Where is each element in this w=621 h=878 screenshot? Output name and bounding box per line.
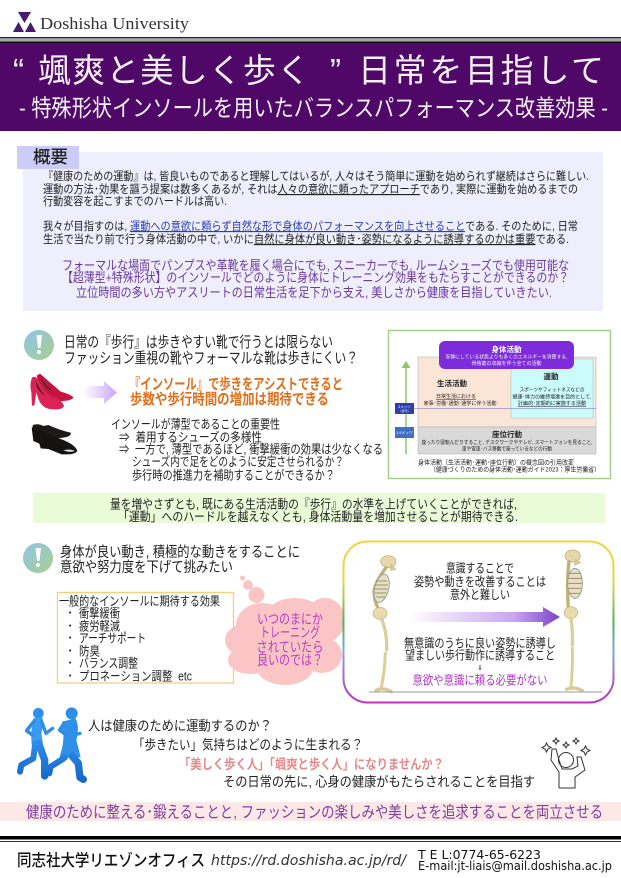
heading: good movement: [60, 544, 300, 576]
light activity area: [418, 357, 596, 427]
panel: insole effects list: [58, 592, 234, 684]
text: unconscious guidance: 意欲や意識に頼る必要がない: [412, 672, 548, 688]
intensity arrow: [405, 366, 407, 454]
panel: insole effects list: ･: [67, 632, 73, 646]
text: why walk: その日常の先に, 心身の健康がもたらされることを目指す: [223, 774, 535, 790]
physical activity header: [439, 341, 574, 369]
heading: good movement: 意欲や努力度を下げて挑みたい: [60, 559, 233, 576]
panel: green conclusion: [33, 493, 605, 524]
text: thin insole importance: ⇒ 着用するシューズの多様性: [119, 430, 262, 444]
overview heading: 概要: [33, 147, 68, 167]
panel: green conclusion: 量を増やさずとも, 既にある生活活動の『歩行』の水準を上げていくことができれば,: [110, 496, 517, 512]
main title: 日常を目指して: [358, 52, 604, 89]
exercise box: [511, 359, 593, 418]
arrow: posture improvement: [408, 607, 560, 627]
text: thin insole importance: [111, 416, 383, 482]
3 METs label: (歩行): [400, 408, 408, 413]
university logo: [13, 12, 190, 33]
panel: insole effects list: ･: [67, 656, 73, 670]
text: conscious posture: 意外と難しい: [450, 587, 510, 602]
label: exercise: 計画的･定期的に実施する活動: [518, 400, 586, 407]
skeleton: hunched: [371, 556, 396, 692]
panel: insole effects list: 一般的なインソールに期待する効果: [59, 594, 220, 608]
skeleton: upright: [564, 550, 582, 691]
icon: exclamation 2: [23, 543, 53, 573]
title banner: [0, 43, 621, 131]
diagram caption: （健康づくりのための身体活動･運動ガイド2023：厚生労働省）: [430, 464, 600, 474]
university name: Doshisha University: [40, 14, 190, 33]
overview text: 生活で当たり前で行う身体活動の中で, いかに自然に身体が良い動き･姿勢になるように誘導するのかは重要である.: [43, 232, 569, 246]
heading: walking shoes question: [64, 334, 358, 367]
text: unconscious guidance: [404, 636, 556, 688]
main title: [13, 52, 604, 89]
text: conscious posture: 姿勢や動きを改善することは: [414, 574, 546, 589]
text: conscious posture: 意識することで: [446, 562, 514, 576]
diagram caption: 身体活動（生活活動･運動･座位行動）の概念図の引用改変: [418, 458, 574, 466]
heading: walking shoes question: ファッション重視の靴やフォーマルな靴は歩きにくい？: [64, 350, 358, 367]
panel: insole effects list: ･: [67, 644, 73, 658]
label: exercise: スポーツやフィットネスなどの: [520, 386, 584, 394]
callout: insole assist: [129, 375, 343, 408]
icon: exclamation 1: [24, 330, 54, 360]
panel: insole effects list: バランス調整: [79, 656, 138, 670]
panel: insole effects list: プロネーション調整 etc: [79, 670, 192, 684]
3 METs label: 3メッツ: [398, 405, 411, 409]
text: why walk: 「歩きたい」気持ちはどのように生まれる？: [133, 738, 363, 752]
overview tab: [17, 146, 79, 169]
panel: insole effects list: 衝撃緩衝: [79, 606, 120, 620]
label: sedentary: 車や電車･バス移動で座っているなどの行動: [462, 446, 552, 452]
panel: insole effects list: ･: [67, 620, 73, 634]
label: sedentary: 座位行動: [492, 429, 522, 439]
main title: 颯爽と美しく歩く: [38, 52, 310, 89]
text: unconscious guidance: ⇓: [477, 664, 483, 672]
logo mark: [13, 12, 36, 32]
panel: posture: [344, 542, 614, 702]
panel: insole effects list: ･: [67, 670, 73, 684]
icon: black dress shoes: [32, 424, 77, 454]
cloud text: トレーニング: [260, 624, 320, 640]
panel: insole effects list: アーチサポート: [79, 632, 146, 646]
cloud text: [256, 611, 324, 668]
cloud text: されていたら: [256, 639, 324, 655]
label: sedentary: 座ったり寝転んだりすること, デスクワークやテレビ, スマートフォンを見ること,: [422, 439, 592, 446]
thought cloud: [225, 576, 345, 685]
text: conscious posture: [414, 562, 546, 602]
overview purple statement: 立位時間の多い方やアスリートの日常生活を足下から支え, 美しさから健康を目指していきたい.: [76, 285, 552, 300]
overview text: [43, 169, 589, 246]
label: daily activity: 日常生活における: [436, 393, 476, 400]
panel: insole effects list: ･: [67, 606, 73, 620]
text: why walk: [88, 718, 535, 790]
panel: overview: [17, 146, 603, 311]
label: exercise: 運動: [544, 371, 559, 381]
label: daily activity: 生活活動: [437, 378, 467, 388]
diagram caption: [418, 458, 600, 474]
physical activity header: 安静にしている状態よりも多くのエネルギーを消費する,: [446, 354, 568, 360]
panel: insole effects list: 防臭: [79, 644, 100, 658]
panel: physical activity diagram: [388, 330, 610, 478]
label: daily activity: [424, 378, 496, 407]
text: thin insole importance: インソールが薄型であることの重要性: [111, 416, 280, 432]
cloud text: いつのまにか: [257, 611, 323, 627]
url: https://rd.doshisha.ac.jp/rd/: [211, 853, 407, 869]
overview purple statement: [62, 258, 569, 300]
physical activity header: 身体活動: [492, 344, 522, 354]
callout: insole assist: 『インソール』で歩きをアシストできると: [129, 375, 343, 393]
footer: contact: [17, 848, 612, 873]
arrow: pumps to insole: [83, 381, 117, 404]
3 METs label: [395, 403, 414, 414]
text: thin insole importance: 歩行時の推進力を補助することができるか？: [132, 468, 335, 482]
label: exercise: [512, 371, 592, 407]
1.5 METs label: 1.5メッツ: [396, 431, 413, 435]
tel: T E L:0774-65-6223: [417, 848, 541, 862]
panel: green conclusion: 「運動」へのハードルを越えなくとも, 身体活動量を増加させることが期待できる.: [118, 509, 518, 524]
label: exercise: 健康･体力の維持増進を目的として,: [512, 394, 592, 400]
office name: 同志社大学リエゾンオフィス: [17, 851, 205, 870]
heading: walking shoes question: 日常の『歩行』は歩きやすい靴で行うとは限らない: [64, 334, 333, 351]
label: sedentary: [422, 429, 592, 452]
label: daily activity: 家事･労働･通勤･通学に伴う活動: [424, 400, 496, 407]
sedentary box: [418, 427, 596, 454]
physical activity header: 骨格筋の収縮を伴う全ての活動: [472, 360, 542, 367]
overview text: 行動変容を起こすまでのハードルは高い.: [43, 194, 227, 208]
icon: runners: [20, 707, 83, 779]
main title: ”: [330, 52, 341, 89]
panel: insole effects list: 疲労軽減: [79, 618, 120, 634]
icon: red pumps: [30, 374, 74, 409]
text: thin insole importance: シューズ内で足をどのように安定させられるか？: [132, 454, 344, 469]
text: why walk: 「美しく歩く人」「颯爽と歩く人」になりませんか？: [179, 756, 444, 772]
text: why walk: 人は健康のために運動するのか？: [88, 718, 272, 734]
icon: person with sparkles: [542, 738, 590, 788]
text: unconscious guidance: 無意識のうちに良い姿勢に誘導し: [404, 636, 556, 650]
overview text: 我々が目指すのは, 運動への意欲に頼らず自然な形で身体のパフォーマンスを向上させることである. そのために, 日常: [43, 219, 578, 233]
cloud text: 良いのでは？: [257, 652, 323, 668]
1.5 METs label: [395, 427, 414, 438]
heading: good movement: 身体が良い動き, 積極的な動きをすることに: [60, 544, 300, 561]
main title: “: [13, 52, 24, 89]
email: E-mail:jt-liais@mail.doshisha.ac.jp: [418, 859, 612, 873]
callout: insole assist: 歩数や歩行時間の増加は期待できる: [130, 390, 329, 408]
text: thin insole importance: ⇒ 一方で, 薄型であるほど, 衝撃緩衝の効果は少なくなる: [119, 442, 383, 456]
text: unconscious guidance: 望ましい歩行動作に誘導すること: [405, 648, 555, 662]
overview text: 運動の方法･効果を謳う提案は数多くあるが, それは人々の意欲に頼ったアプローチであり, 実際に運動を始めるまでの: [43, 182, 578, 196]
